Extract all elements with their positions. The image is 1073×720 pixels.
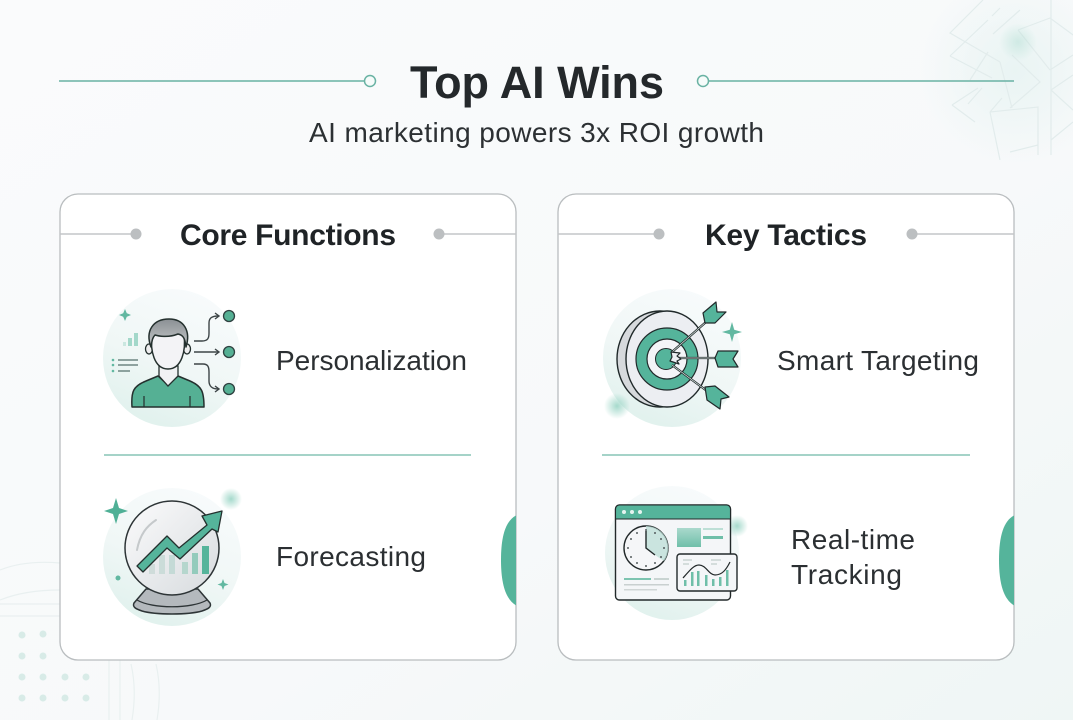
subtitle: AI marketing powers 3x ROI growth (309, 117, 764, 148)
heading connector left (60, 228, 142, 240)
decoration: geometric lines top right (920, 0, 1073, 165)
panel: Key Tactics (558, 194, 1015, 660)
title: Top AI Wins (410, 57, 664, 108)
text: Personalization: Personalization (276, 345, 467, 376)
panel heading: Core Functions: Core Functions (180, 219, 396, 252)
icon: personalization (103, 289, 241, 427)
panel heading: Key Tactics: Key Tactics (705, 219, 867, 252)
heading connector right (906, 228, 1014, 240)
title connector right (698, 76, 1014, 86)
text: Real-time Tracking: Real-time (791, 524, 915, 555)
text: Real-time Tracking (791, 524, 915, 590)
side tab (501, 515, 517, 606)
text: Forecasting: Forecasting (276, 541, 426, 572)
icon: smart targeting (603, 289, 742, 427)
panel: Core Functions (60, 194, 517, 660)
title connector left (59, 76, 376, 86)
text: Real-time Tracking: Tracking (791, 559, 902, 590)
side tab (999, 515, 1015, 606)
heading connector right (434, 228, 516, 240)
text: Smart Targeting: Smart Targeting (777, 345, 979, 376)
icon: forecasting (103, 488, 242, 626)
decoration: arcs and dots bottom left (0, 562, 159, 720)
heading connector left (558, 228, 664, 240)
icon: real-time tracking (605, 486, 748, 620)
